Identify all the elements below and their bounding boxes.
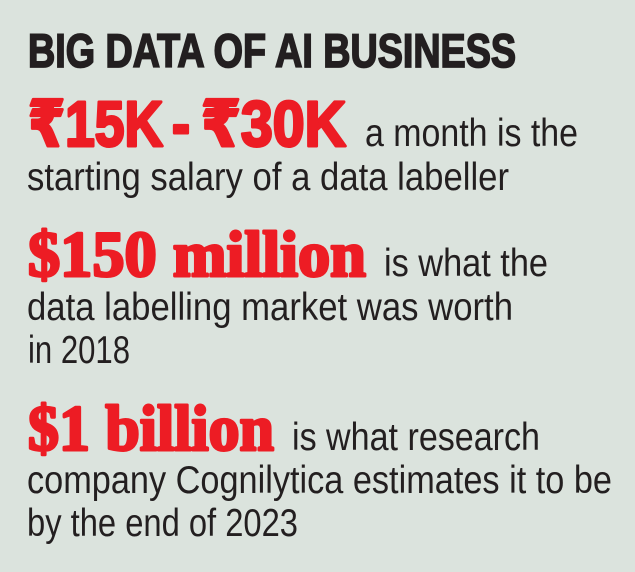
estimate figure: $1 billion (28, 393, 274, 465)
stat block: 2023 estimate (27, 393, 612, 545)
title: BIG DATA OF AI BUSINESS (28, 24, 516, 77)
salary figure: - (172, 88, 190, 160)
salary description line 1: a month is the (365, 112, 578, 155)
stat block: market value 2018 (27, 219, 548, 372)
estimate description line 1: is what research (292, 416, 540, 459)
estimate description line 3: by the end of 2023 (27, 502, 298, 545)
stat block: starting salary (27, 88, 578, 199)
market description line 3: in 2018 (28, 329, 130, 372)
salary figure (28, 88, 346, 160)
salary description line 2: starting salary of a data labeller (27, 156, 509, 199)
market figure: $150 million (28, 219, 366, 291)
salary figure: ₹30K (201, 88, 346, 160)
market description line 2: data labelling market was worth (27, 286, 513, 329)
market description line 1: is what the (384, 242, 548, 285)
salary figure: ₹15K (28, 88, 163, 160)
